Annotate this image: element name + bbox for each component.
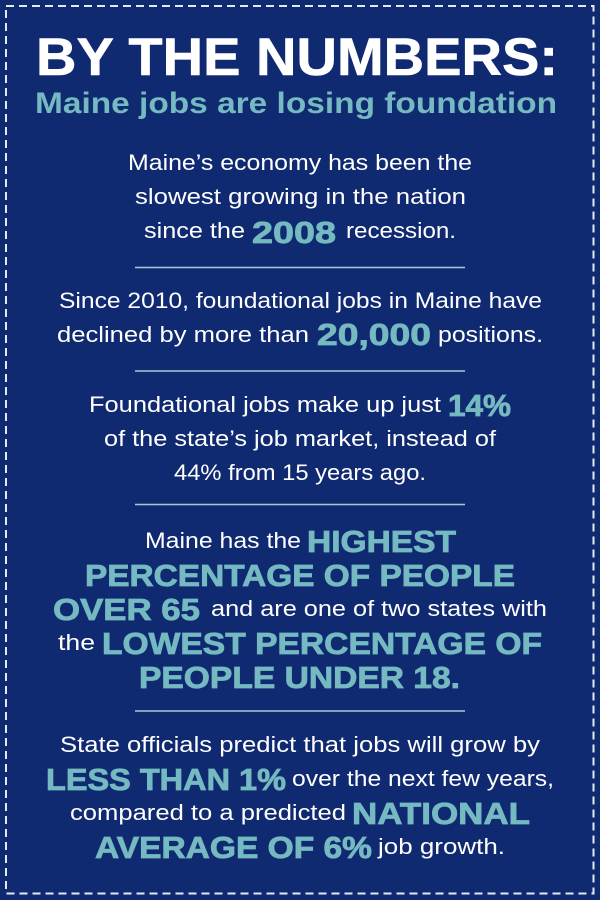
text block: foundational jobs decline: 20,000: [317, 318, 431, 352]
text block: share of job market: [89, 389, 511, 485]
text block: age demographics: OVER 65: [53, 593, 200, 627]
text block: job growth prediction: compared to a predicted: [70, 800, 346, 825]
text block: job growth prediction: LESS THAN 1%: [46, 763, 286, 797]
text block: foundational jobs decline: [57, 288, 543, 352]
text block: slowest growing economy: recession.: [346, 218, 456, 243]
text block: age demographics: the: [58, 630, 95, 655]
title: BY THE NUMBERS:: [36, 28, 558, 87]
text block: slowest growing economy: since the: [144, 218, 245, 243]
text block: job growth prediction: AVERAGE OF 6%: [95, 831, 372, 865]
text block: job growth prediction: State officials predict that jobs will grow by: [60, 732, 540, 757]
text block: foundational jobs decline: declined by more than: [57, 322, 309, 347]
text block: age demographics: PEOPLE UNDER 18.: [139, 661, 460, 695]
text block: job growth prediction: [46, 732, 554, 865]
text block: job growth prediction: job growth.: [377, 834, 505, 859]
text block: share of job market: of the state’s job market, instead of: [104, 426, 497, 451]
text block: age demographics: PERCENTAGE OF PEOPLE: [85, 559, 515, 593]
text block: slowest growing economy: 2008: [252, 216, 336, 250]
text block: slowest growing economy: Maine’s economy has been the: [128, 150, 472, 175]
text block: age demographics: [53, 525, 547, 695]
text block: share of job market: 44% from 15 years ago.: [174, 460, 426, 485]
text block: slowest growing economy: [128, 150, 472, 250]
text block: age demographics: Maine has the: [145, 528, 301, 553]
text block: slowest growing economy: slowest growing in the nation: [135, 184, 466, 209]
text block: age demographics: LOWEST PERCENTAGE OF: [102, 627, 542, 661]
subtitle: Maine jobs are losing foundation: [35, 87, 557, 120]
text block: age demographics: and are one of two states with: [211, 596, 547, 621]
text block: job growth prediction: over the next few years,: [292, 766, 554, 791]
text block: share of job market: 14%: [448, 389, 511, 423]
text block: foundational jobs decline: Since 2010, foundational jobs in Maine have: [59, 288, 542, 313]
text block: age demographics: HIGHEST: [307, 525, 456, 559]
text block: share of job market: Foundational jobs make up just: [89, 392, 441, 417]
text block: job growth prediction: NATIONAL: [352, 797, 530, 831]
text block: foundational jobs decline: positions.: [438, 322, 543, 347]
